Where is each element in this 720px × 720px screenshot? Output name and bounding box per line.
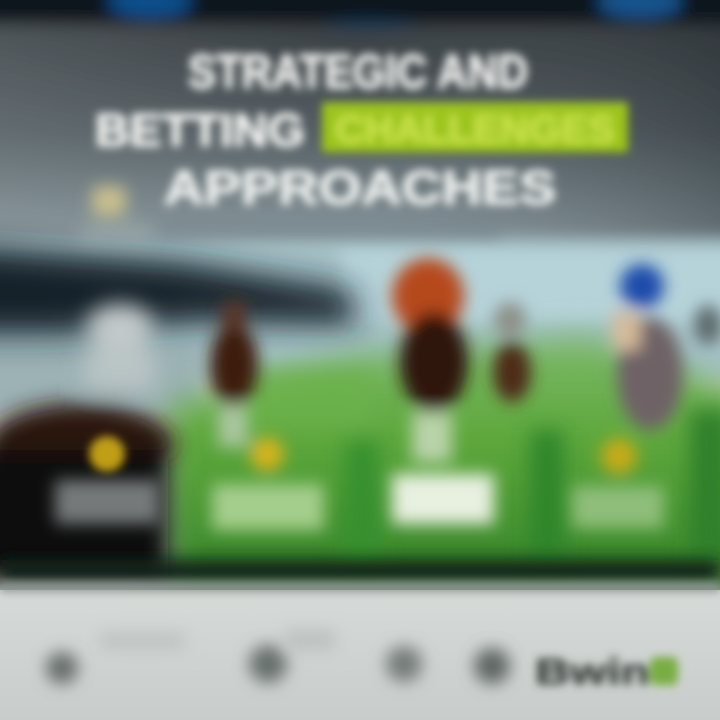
bottom shadow of pitch	[0, 560, 720, 582]
background: stadium sky	[0, 20, 720, 245]
icon: gold badge 2	[250, 437, 284, 471]
title line 2: BETTING	[95, 104, 305, 156]
icon: footer item 1	[46, 652, 78, 684]
icon: gold badge 4	[601, 438, 637, 474]
footer text 2	[285, 630, 335, 650]
pitch mowing stripes	[240, 370, 720, 565]
top dark band with stadium lights	[0, 0, 720, 29]
player 4: blue helmet	[572, 264, 720, 528]
card text 3	[392, 474, 494, 524]
subtitle strip	[160, 222, 500, 236]
icon: footer item 4	[474, 648, 510, 684]
title line 1: STRATEGIC AND	[188, 46, 528, 99]
player 2	[210, 300, 324, 530]
footer text 1	[100, 632, 185, 650]
stand shadow	[0, 245, 360, 335]
title highlight: CHALLENGES	[335, 108, 615, 152]
card text 2	[212, 484, 324, 530]
icon: gold badge 1	[89, 436, 125, 472]
title line 3: APPROACHES	[164, 162, 556, 215]
player card 1: dark team	[0, 304, 175, 580]
icon: footer item 2	[249, 645, 287, 683]
card text 4	[572, 486, 664, 528]
footer top edge	[0, 582, 720, 592]
player 3: orange helmet	[392, 258, 531, 524]
icon: small trophy	[82, 186, 148, 240]
footer logo	[535, 651, 678, 692]
card text 1	[55, 480, 160, 524]
icon: footer item 3	[386, 646, 422, 682]
footer panel	[0, 582, 720, 720]
footer logo: Bwin	[535, 651, 650, 692]
background: stadium scene	[0, 0, 720, 415]
football pitch	[165, 335, 720, 590]
background: distant horizon	[0, 240, 720, 415]
